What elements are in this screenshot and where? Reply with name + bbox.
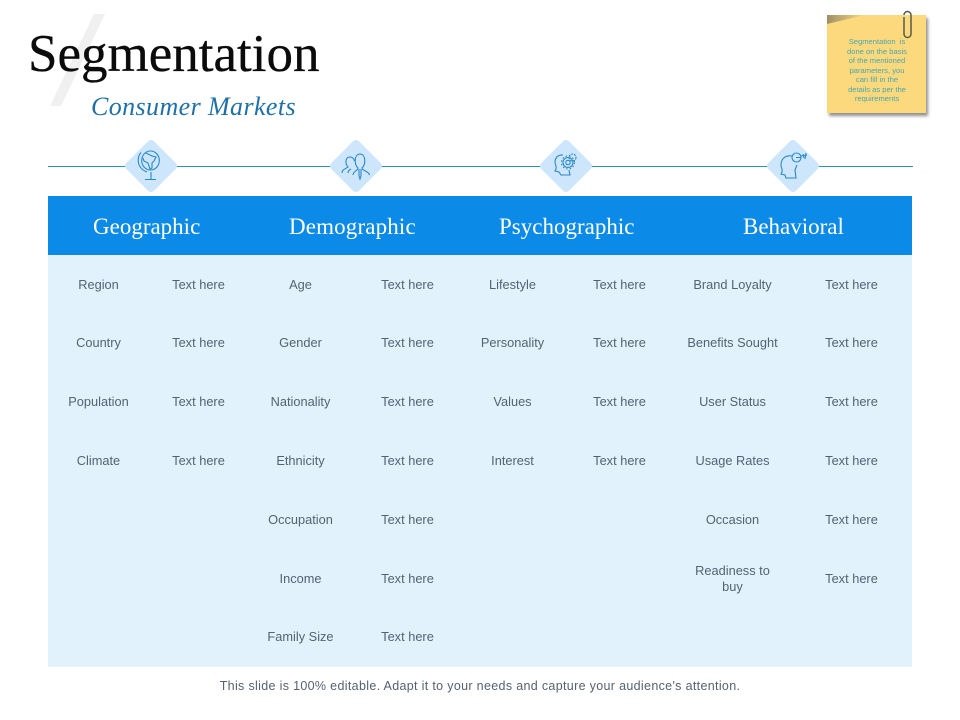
sticky note text: Segmentation is	[849, 37, 905, 46]
column: Geographic items: Population	[68, 394, 129, 409]
column: Demographic items: Text here	[381, 453, 434, 468]
column: Behavioral items: Text here	[825, 277, 878, 292]
column: Geographic items: Region	[78, 277, 119, 292]
sticky note corner shading	[827, 15, 865, 24]
icon: people	[330, 140, 382, 192]
icon: head with gears	[540, 140, 592, 192]
column: Psychographic items: Text here	[593, 335, 646, 350]
column: Geographic items: Text here	[172, 453, 225, 468]
timeline line	[48, 166, 913, 167]
decorative slash	[50, 14, 105, 106]
column: Demographic items: Income	[280, 571, 321, 586]
column: Behavioral items: Brand Loyalty	[693, 277, 772, 292]
sticky note text: requirements	[855, 94, 899, 103]
column: Psychographic items: Text here	[593, 453, 646, 468]
column: Behavioral items: Occasion	[706, 512, 759, 527]
column: Geographic items: Text here	[172, 277, 225, 292]
column: Geographic items: Text here	[172, 394, 225, 409]
sticky note text: of the mentioned	[849, 56, 905, 65]
column: Demographic items: Family Size	[267, 629, 334, 644]
column: Geographic items: Climate	[77, 453, 120, 468]
heading: Psychographic: Psychographic	[499, 214, 634, 239]
table header band	[48, 196, 912, 255]
column: Geographic items: Country	[76, 335, 121, 350]
sticky note text: parameters, you	[850, 66, 904, 74]
column: Demographic items: Text here	[381, 277, 434, 292]
heading: Geographic: Geographic	[93, 214, 200, 239]
column: Demographic items: Nationality	[271, 394, 330, 409]
column: Behavioral items: Benefits Sought	[687, 335, 778, 350]
column: Demographic items: Text here	[381, 629, 434, 644]
column: Behavioral items: Text here	[825, 453, 878, 468]
column: Demographic items: Ethnicity	[276, 453, 325, 468]
footer note: This slide is 100% editable. Adapt it to your needs and capture your audience's attention.	[220, 679, 740, 693]
sticky note text	[847, 37, 907, 103]
column: Psychographic items: Text here	[593, 394, 646, 409]
column: Behavioral items: Text here	[825, 335, 878, 350]
column: Geographic items	[68, 277, 225, 468]
column: Demographic items	[267, 277, 434, 644]
icon: globe	[125, 140, 177, 192]
column: Psychographic items: Values	[493, 394, 532, 409]
column: Behavioral items: User Status	[699, 394, 766, 409]
heading: Behavioral: Behavioral	[743, 214, 844, 239]
column: Psychographic items: Text here	[593, 277, 646, 292]
column: Psychographic items: Lifestyle	[489, 277, 536, 292]
column: Behavioral items: Readiness to buy	[695, 563, 770, 594]
column: Demographic items: Text here	[381, 335, 434, 350]
subtitle: Consumer Markets	[91, 92, 296, 121]
column: Behavioral items	[687, 277, 878, 594]
table body panel	[48, 255, 912, 667]
column: Behavioral items: Usage Rates	[696, 453, 769, 468]
sticky note text: details as per the	[848, 84, 906, 94]
heading: Demographic: Demographic	[289, 214, 416, 239]
column: Demographic items: Text here	[381, 394, 434, 409]
column: Psychographic items	[481, 277, 646, 468]
paper clip	[903, 10, 912, 38]
column: Demographic items: Gender	[279, 335, 322, 350]
column: Demographic items: Text here	[381, 512, 434, 527]
column: Geographic items: Text here	[172, 335, 225, 350]
column: Demographic items: Text here	[381, 571, 434, 586]
sticky note text: done on the basis	[847, 46, 907, 56]
sticky note text: can fill in the	[856, 75, 898, 84]
column: Behavioral items: Text here	[825, 571, 878, 586]
column: Behavioral items: Text here	[825, 394, 878, 409]
column: Demographic items: Occupation	[268, 512, 333, 527]
title: Segmentation	[28, 25, 319, 83]
icon: head with target	[767, 140, 819, 192]
column: Psychographic items: Personality	[481, 335, 544, 350]
sticky note	[827, 15, 926, 113]
column: Demographic items: Age	[289, 277, 312, 292]
column: Behavioral items: Text here	[825, 512, 878, 527]
column: Psychographic items: Interest	[491, 453, 534, 468]
